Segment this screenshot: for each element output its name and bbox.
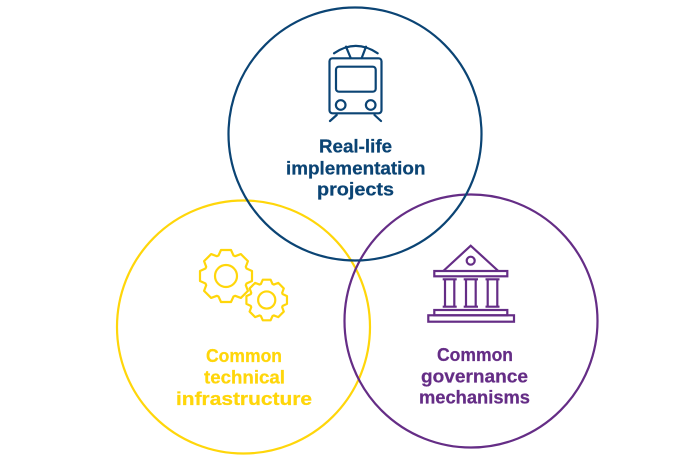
heading: common governance mechanisms: mechanisms: [419, 386, 530, 408]
circle: common governance mechanisms: [344, 194, 598, 448]
heading: common governance mechanisms: governance: [421, 366, 528, 387]
icon: institution building: [428, 246, 514, 322]
heading: real-life implementation projects: Real-life: [319, 136, 392, 157]
heading: real-life implementation projects: projects: [317, 179, 394, 200]
icon: tram: [330, 46, 382, 121]
heading: common technical infrastructure: [176, 345, 312, 409]
circle: real-life implementation projects: [228, 8, 482, 260]
heading: common technical infrastructure: Common: [206, 345, 282, 366]
icon: gears: [200, 250, 287, 320]
heading: common governance mechanisms: [419, 344, 530, 408]
heading: real-life implementation projects: implementation: [286, 158, 426, 179]
heading: common technical infrastructure: technical: [204, 366, 285, 388]
circle: common technical infrastructure: [117, 200, 370, 454]
heading: common governance mechanisms: Common: [437, 344, 513, 365]
heading: real-life implementation projects: [286, 136, 426, 200]
heading: common technical infrastructure: infrastructure: [176, 388, 312, 409]
